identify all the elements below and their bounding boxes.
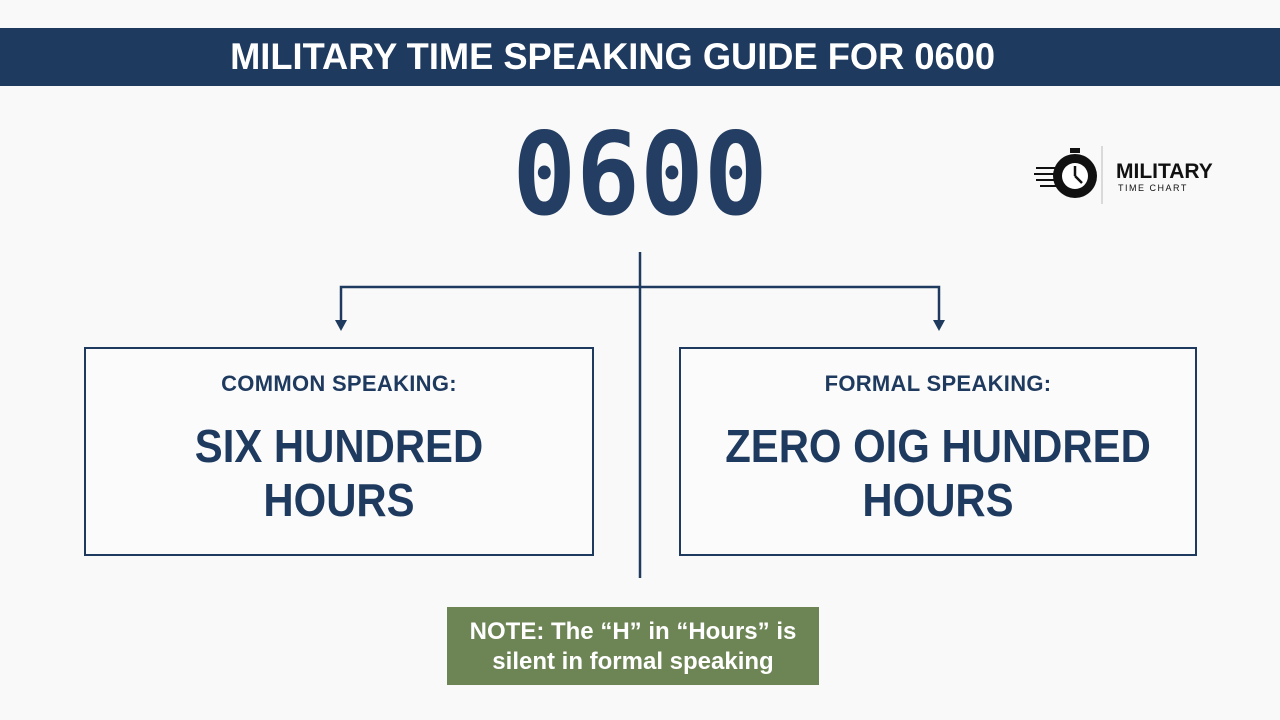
- panel: formal speaking: ZERO OIG HUNDRED: [725, 420, 1151, 472]
- title bar: MILITARY TIME SPEAKING GUIDE FOR 0600: [230, 36, 995, 77]
- panel: formal speaking: HOURS: [862, 474, 1014, 526]
- big time 0600: 0600: [512, 108, 768, 241]
- panel: common speaking: [84, 347, 594, 556]
- logo: military time chart: [1034, 146, 1213, 204]
- panel: common speaking: SIX HUNDRED: [195, 420, 483, 472]
- panel: common speaking: HOURS: [263, 474, 415, 526]
- title bar: [0, 28, 1280, 86]
- note callout: [447, 607, 819, 685]
- logo: military time chart: MILITARY: [1116, 160, 1213, 183]
- note callout: silent in formal speaking: [492, 648, 774, 675]
- logo: military time chart: TIME CHART: [1118, 183, 1188, 193]
- panel: common speaking: COMMON SPEAKING:: [221, 371, 457, 396]
- panel: formal speaking: [679, 347, 1197, 556]
- note callout: NOTE: The “H” in “Hours” is: [470, 618, 796, 645]
- panel: formal speaking: FORMAL SPEAKING:: [825, 371, 1051, 396]
